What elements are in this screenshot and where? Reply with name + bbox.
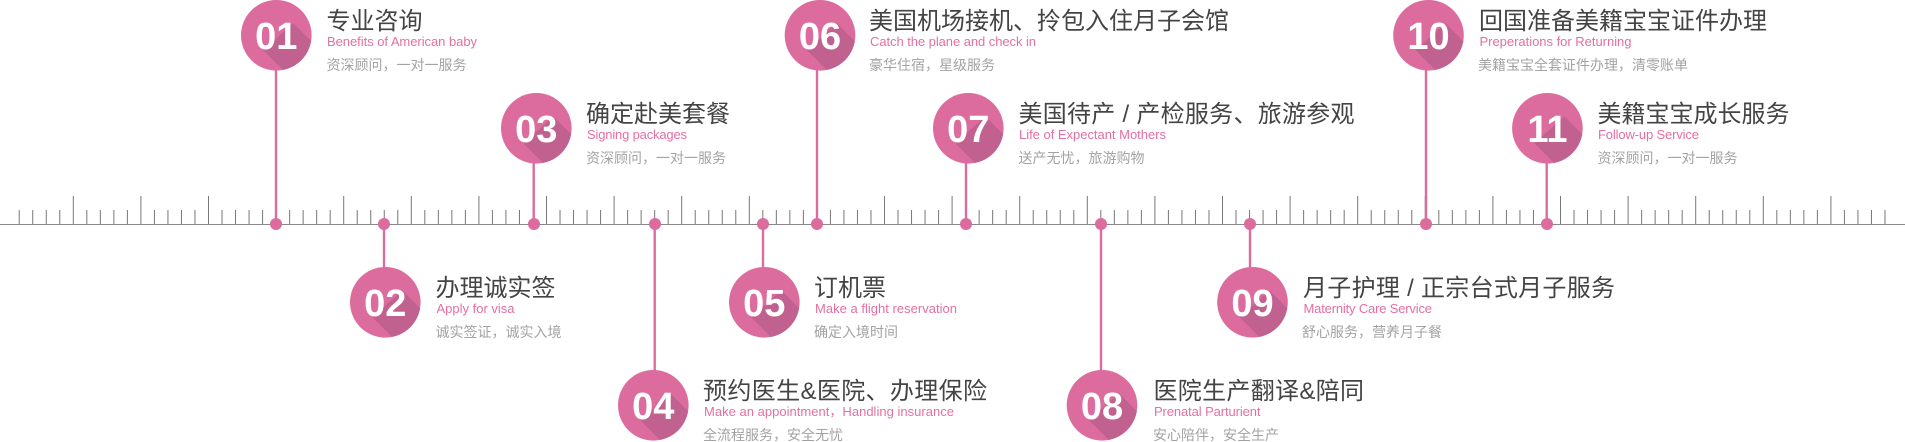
badge 09 bbox=[1217, 267, 1288, 338]
connector 05 bbox=[762, 224, 764, 275]
step 01 bbox=[241, 0, 478, 230]
step 08 bbox=[1067, 218, 1364, 442]
connector 10 bbox=[1425, 60, 1427, 224]
connector 04 bbox=[654, 224, 656, 378]
axis dot 08 bbox=[1095, 218, 1107, 230]
subtitle 11: Follow-up Service bbox=[1598, 127, 1699, 142]
badge 08: 08 bbox=[1081, 386, 1123, 428]
step 11 bbox=[1512, 93, 1790, 230]
subtitle 07: Life of Expectant Mothers bbox=[1019, 127, 1166, 142]
description 06: 豪华住宿，星级服务 bbox=[869, 57, 995, 73]
connector 06 bbox=[816, 60, 818, 224]
step 05 bbox=[729, 218, 956, 338]
heading 08: 医院生产翻译&陪同 bbox=[1154, 378, 1364, 405]
step 04 bbox=[618, 218, 987, 442]
connector 08 bbox=[1100, 224, 1102, 378]
description 01: 资深顾问，一对一服务 bbox=[326, 57, 466, 73]
axis dot 03 bbox=[528, 218, 540, 230]
heading 06: 美国机场接机、拎包入住月子会馆 bbox=[869, 8, 1229, 35]
step 06 bbox=[785, 0, 1229, 230]
badge 06 bbox=[784, 0, 856, 71]
step 07 bbox=[933, 93, 1354, 230]
heading 07: 美国待产 / 产检服务、旅游参观 bbox=[1018, 101, 1354, 128]
connector 01 bbox=[275, 60, 277, 224]
heading 01: 专业咨询 bbox=[326, 8, 422, 35]
timeline ruler bbox=[0, 196, 1905, 225]
badge 07 bbox=[933, 93, 1004, 164]
axis dot 06 bbox=[811, 218, 823, 230]
description 07: 送产无忧，旅游购物 bbox=[1018, 150, 1144, 166]
subtitle 05: Make a flight reservation bbox=[815, 301, 957, 316]
badge 10: 10 bbox=[1407, 16, 1450, 58]
badge 09: 09 bbox=[1231, 283, 1274, 325]
badge 11 bbox=[1512, 93, 1583, 164]
connector 03 bbox=[533, 155, 535, 224]
axis dot 09 bbox=[1244, 218, 1256, 230]
axis dot 05 bbox=[757, 218, 769, 230]
connector 07 bbox=[965, 155, 967, 224]
subtitle 09: Maternity Care Service bbox=[1304, 301, 1432, 316]
badge 10 bbox=[1393, 0, 1464, 71]
badge 02 bbox=[350, 267, 421, 338]
description 10: 美籍宝宝全套证件办理，清零账单 bbox=[1478, 57, 1688, 73]
axis dot 02 bbox=[378, 218, 390, 230]
connector 11 bbox=[1545, 155, 1548, 224]
badge 05 bbox=[729, 267, 800, 338]
step 03 bbox=[501, 93, 730, 230]
heading 11: 美籍宝宝成长服务 bbox=[1598, 101, 1790, 128]
subtitle 04: Make an appointment，Handling insurance bbox=[704, 404, 954, 419]
description 05: 确定入境时间 bbox=[814, 324, 898, 340]
heading 05: 订机票 bbox=[814, 275, 886, 302]
heading 09: 月子护理 / 正宗台式月子服务 bbox=[1303, 275, 1615, 302]
axis dot 04 bbox=[649, 218, 661, 230]
description 02: 诚实签证，诚实入境 bbox=[436, 324, 562, 340]
step 10 bbox=[1393, 0, 1767, 230]
badge 04: 04 bbox=[632, 386, 674, 428]
badge 06: 06 bbox=[799, 16, 841, 58]
badge 05: 05 bbox=[743, 283, 785, 325]
badge 11: 11 bbox=[1527, 109, 1567, 151]
heading 02: 办理诚实签 bbox=[436, 275, 556, 302]
badge 03: 03 bbox=[515, 109, 557, 151]
badge 03 bbox=[501, 93, 572, 164]
badge 04 bbox=[618, 370, 689, 441]
description 11: 资深顾问，一对一服务 bbox=[1598, 150, 1738, 166]
subtitle 10: Preperations for Returning bbox=[1480, 34, 1632, 49]
badge 02: 02 bbox=[364, 283, 406, 325]
heading 10: 回国准备美籍宝宝证件办理 bbox=[1479, 8, 1767, 35]
step 02 bbox=[350, 218, 561, 338]
step 09 bbox=[1217, 218, 1614, 338]
subtitle 02: Apply for visa bbox=[436, 301, 515, 316]
axis dot 07 bbox=[960, 218, 972, 230]
connector 09 bbox=[1249, 224, 1251, 275]
connector 02 bbox=[383, 224, 385, 275]
badge 01 bbox=[241, 0, 312, 71]
description 09: 舒心服务，营养月子餐 bbox=[1302, 324, 1442, 340]
axis dot 10 bbox=[1420, 218, 1432, 230]
subtitle 06: Catch the plane and check in bbox=[870, 34, 1036, 49]
heading 04: 预约医生&医院、办理保险 bbox=[703, 378, 987, 405]
badge 08 bbox=[1066, 370, 1138, 441]
axis dot 01 bbox=[270, 218, 282, 230]
badge 07: 07 bbox=[947, 109, 989, 151]
description 03: 资深顾问，一对一服务 bbox=[586, 150, 726, 166]
badge 01: 01 bbox=[255, 16, 297, 58]
subtitle 01: Benefits of American baby bbox=[327, 34, 478, 49]
heading 03: 确定赴美套餐 bbox=[586, 101, 730, 128]
subtitle 03: Signing packages bbox=[587, 127, 688, 142]
subtitle 08: Prenatal Parturient bbox=[1154, 404, 1261, 419]
axis dot 11 bbox=[1541, 218, 1553, 230]
